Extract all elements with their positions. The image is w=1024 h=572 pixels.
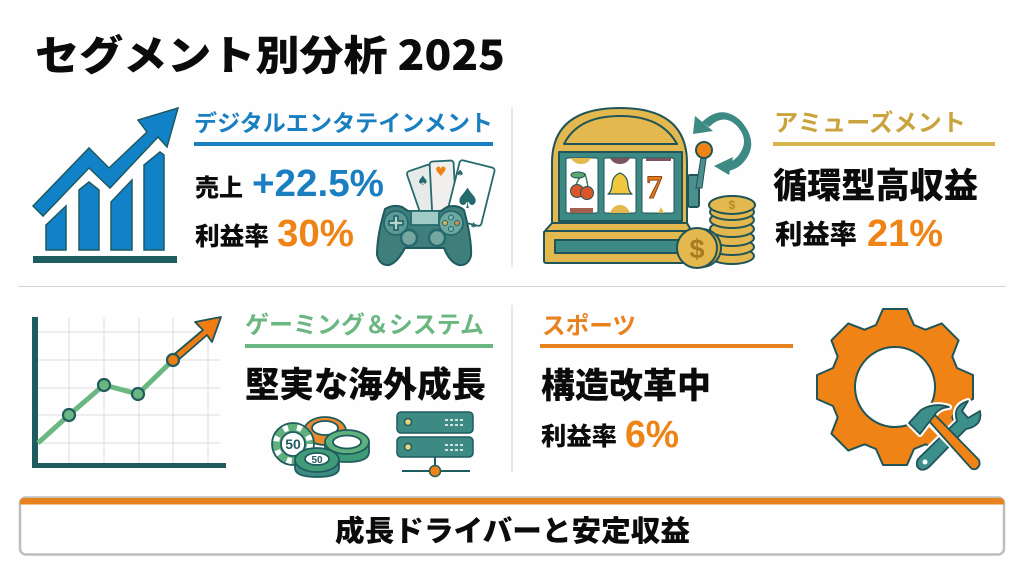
icon: coin stack: $ xyxy=(729,198,736,212)
profit rate figure: 21% xyxy=(867,213,943,255)
sales figure: +22.5% xyxy=(252,163,384,205)
icon: hammer xyxy=(909,405,980,469)
icon: cards and game controller: ♥ xyxy=(435,165,447,180)
line chart with arrow xyxy=(32,317,226,468)
statement: under restructuring: 構造改革中 xyxy=(541,358,711,409)
sales figure: 売上 xyxy=(195,168,243,203)
icon: slot machine with coins xyxy=(544,108,755,268)
panel: sports xyxy=(540,306,980,470)
heading: digital entertainment: デジタルエンタテインメント xyxy=(194,104,493,138)
heading: gaming and systems: ゲーミング＆システム xyxy=(245,305,484,340)
profit rate figure: 6% xyxy=(625,414,679,456)
icon: wrench xyxy=(917,401,980,470)
icon: cards and game controller: ♠ xyxy=(470,221,477,230)
profit rate figure: 30% xyxy=(277,213,354,255)
summary banner xyxy=(20,498,1004,554)
panel: amusement xyxy=(544,103,995,268)
icon: gear with tools xyxy=(817,309,980,470)
profit rate figure xyxy=(195,213,354,255)
icon: coin stack xyxy=(677,196,755,268)
icon: rising bar chart with arrow xyxy=(33,108,178,263)
banner text: 成長ドライバーと安定収益 xyxy=(335,508,690,550)
profit rate figure xyxy=(541,414,679,456)
icon: cards and game controller: ♠ xyxy=(417,174,429,189)
icon: cards and game controller: ♠ xyxy=(455,182,480,215)
panel: gaming and systems xyxy=(32,305,493,477)
title: セグメント別分析 2025 xyxy=(35,22,505,82)
icon: cherries xyxy=(570,172,594,200)
icon: lever xyxy=(688,175,699,207)
icon: bell xyxy=(608,173,632,194)
statement: steady overseas growth: 堅実な海外成長 xyxy=(245,357,486,408)
icon: cards and game controller: ♠ xyxy=(456,169,464,179)
profit rate figure: 利益率 xyxy=(775,213,857,252)
profit rate figure: 利益率 xyxy=(541,417,617,453)
icon: casino chips: 50 xyxy=(285,436,301,452)
sales figure xyxy=(195,163,384,205)
icon: server xyxy=(397,412,473,476)
icon: coin stack: $ xyxy=(689,234,705,264)
icon: cards and game controller xyxy=(377,160,495,265)
profit rate figure xyxy=(775,213,943,255)
icon: casino chips xyxy=(272,417,369,477)
statement: recurring high revenue: 循環型高収益 xyxy=(773,158,978,209)
heading: amusement: アミューズメント xyxy=(774,103,966,138)
heading: sports: スポーツ xyxy=(542,306,636,341)
icon: casino chips: 50 xyxy=(311,455,323,466)
panel: digital entertainment xyxy=(33,104,495,265)
icon: circular arrow xyxy=(693,112,751,175)
profit rate figure: 利益率 xyxy=(195,217,269,253)
seven: 7 xyxy=(646,170,662,206)
